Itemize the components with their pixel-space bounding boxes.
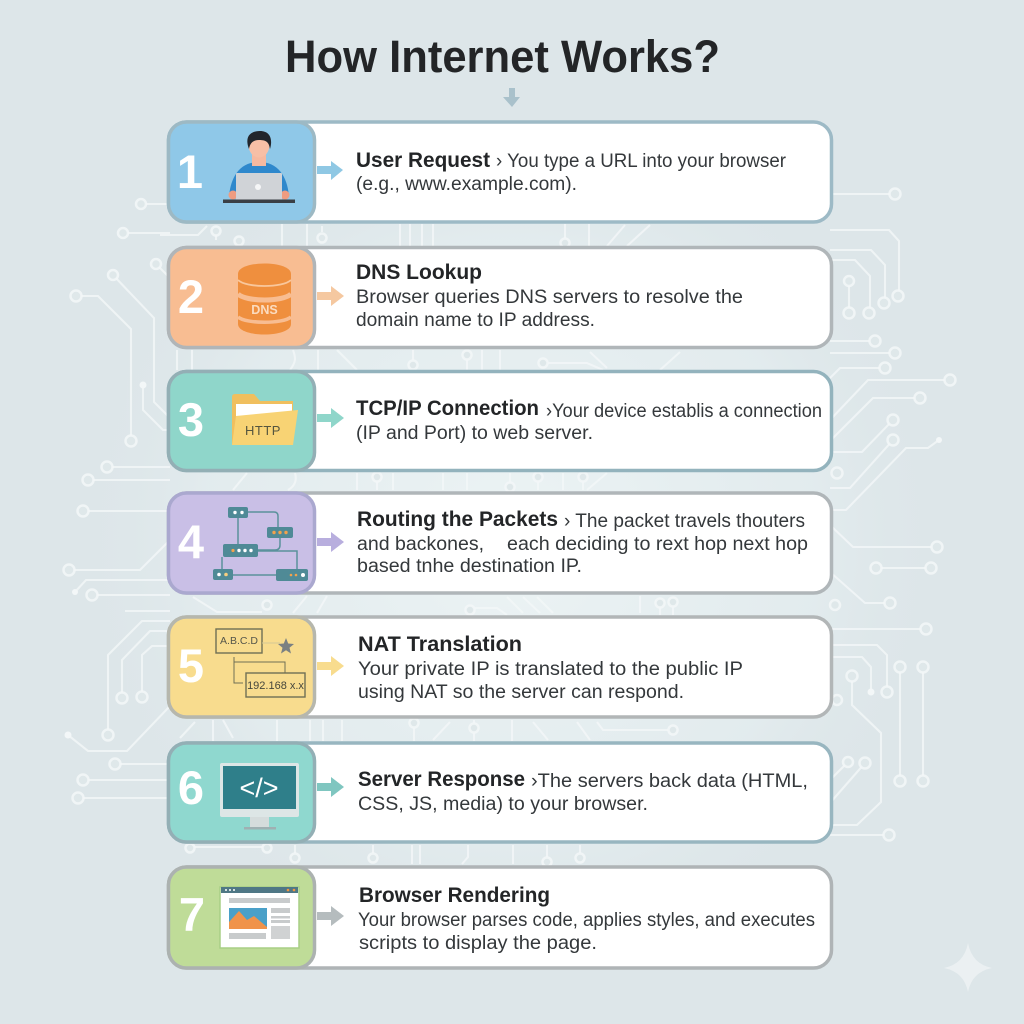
icon: NAT address translation xyxy=(216,629,305,697)
description 2 xyxy=(356,287,743,331)
step number 6: 6 xyxy=(178,761,204,814)
description 6 xyxy=(358,771,808,815)
description 7: Your browser parses code, applies styles, and executes xyxy=(358,910,815,931)
heading 2: DNS Lookup xyxy=(356,260,482,284)
description 3: (IP and Port) to web server. xyxy=(356,423,593,444)
arrow: title down arrow xyxy=(503,88,520,107)
step number 7: 7 xyxy=(179,888,205,941)
step number 1: 1 xyxy=(177,145,203,198)
panel: step 4 routing the packets xyxy=(168,493,832,593)
arrow 1 xyxy=(317,161,343,180)
description 5 xyxy=(358,659,743,703)
heading 4: Routing the Packets xyxy=(357,507,558,531)
panel: step 1 user request xyxy=(168,122,832,222)
description 5: Your private IP is translated to the public IP xyxy=(358,659,743,680)
description 7 xyxy=(358,910,815,954)
arrow 2 xyxy=(317,286,344,306)
icon: person with laptop xyxy=(223,131,295,203)
description 2: Browser queries DNS servers to resolve the xyxy=(356,287,743,308)
step number 3: 3 xyxy=(178,393,204,446)
arrow 7 xyxy=(317,906,344,926)
panel: step 7 browser rendering xyxy=(168,867,832,968)
arrow 5 xyxy=(317,656,344,676)
heading 1: User Request xyxy=(356,148,490,172)
description 4 xyxy=(357,511,808,577)
description 2: domain name to IP address. xyxy=(356,310,595,331)
icon: sparkle xyxy=(944,943,992,992)
description 4: based tnhe destination IP. xyxy=(357,556,582,577)
arrow 4 xyxy=(317,532,344,552)
description 6: ›The servers back data (HTML, xyxy=(531,771,808,792)
icon: HTTP folder xyxy=(232,394,298,445)
icon: browser window xyxy=(220,887,299,948)
icon: DNS database xyxy=(238,264,291,334)
heading 3: TCP/IP Connection xyxy=(356,396,539,420)
icon: router network xyxy=(213,507,308,581)
description 1: › You type a URL into your browser xyxy=(496,151,787,172)
description 5: using NAT so the server can respond. xyxy=(358,682,684,703)
icon: NAT address translation: A.B.C.D xyxy=(220,635,258,647)
panel: step 2 DNS lookup xyxy=(168,248,832,348)
icon: NAT address translation: 192.168 x.x xyxy=(247,680,304,692)
title: How Internet Works? xyxy=(285,31,720,82)
heading 5: NAT Translation xyxy=(358,632,522,656)
step number 2: 2 xyxy=(178,270,204,323)
description 6: CSS, JS, media) to your browser. xyxy=(358,794,648,815)
description 1: (e.g., www.example.com). xyxy=(356,174,577,195)
description 4: each deciding to rext hop next hop xyxy=(507,534,808,555)
heading 6: Server Response xyxy=(358,767,525,791)
icon: monitor with code xyxy=(220,763,299,830)
step number 5: 5 xyxy=(178,639,204,692)
description 3 xyxy=(356,401,822,444)
description 4: › The packet travels thouters xyxy=(564,511,805,532)
step number 4: 4 xyxy=(178,515,204,568)
arrow 3 xyxy=(317,408,344,428)
panel: step 5 NAT translation xyxy=(168,617,832,717)
circuit board pattern xyxy=(64,188,956,866)
panel: step 3 TCP/IP connection xyxy=(168,372,832,470)
panel: step 6 server response xyxy=(168,743,832,842)
arrow 6 xyxy=(317,777,344,797)
icon: DNS database: DNS xyxy=(251,303,278,317)
description 1 xyxy=(356,151,787,195)
description 4: and backones, xyxy=(357,534,484,555)
icon: HTTP folder: HTTP xyxy=(245,423,281,438)
icon: monitor with code: </> xyxy=(239,773,279,803)
description 3: ›Your device establis a connection xyxy=(546,401,822,422)
description 7: scripts to display the page. xyxy=(359,933,597,954)
heading 7: Browser Rendering xyxy=(359,883,550,907)
